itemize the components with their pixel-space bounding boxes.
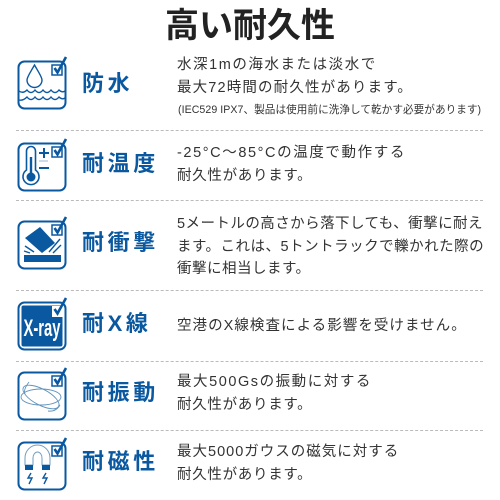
label: waterproof: 防水 [82,71,133,96]
text: vibration line 1: 最大500Gsの振動に対する [177,374,372,390]
title: 高い耐久性 [165,7,335,45]
text: temperature line 2: 耐久性があります。 [177,168,312,184]
icon: x-ray [18,297,68,350]
text: waterproof: 水深1mの海水または淡水で [177,57,377,73]
icon: water drop and waves [18,56,68,110]
text: magnetism line 1: 最大5000ガウスの磁気に対する [177,444,399,460]
text: waterproof note: (IEC529 IPX7、製品は使用前に洗浄して乾かす必要があります) [178,104,481,116]
text: waterproof line 2: 最大72時間の耐久性があります。 [177,80,413,96]
text: magnetism line 2: 耐久性があります。 [177,467,312,483]
text: vibration line 2: 耐久性があります。 [177,397,312,413]
label: vibration: 耐振動 [82,380,159,405]
icon: x-ray: X-ray [24,315,61,342]
label: x-ray: 耐X線 [82,311,151,336]
text: temperature line 1: -25°C～85°Cの温度で動作する [177,145,406,161]
label: impact: 耐衝撃 [82,230,159,255]
icon: impact [18,216,68,270]
icon: vibration [18,367,68,420]
icon: thermometer [18,138,68,192]
text: impact line 2: ます。これは、5トントラックで轢かれた際の [177,239,484,255]
icon: magnet [18,437,68,490]
text: x-ray: 空港のX線検査による影響を受けません。 [177,318,467,334]
text: impact line 3: 衝撃に相当します。 [177,261,311,277]
label: magnetism: 耐磁性 [82,449,159,474]
label: temperature: 耐温度 [82,151,159,176]
text: impact line 1: 5メートルの高さから落下しても、衝撃に耐え [177,216,483,232]
